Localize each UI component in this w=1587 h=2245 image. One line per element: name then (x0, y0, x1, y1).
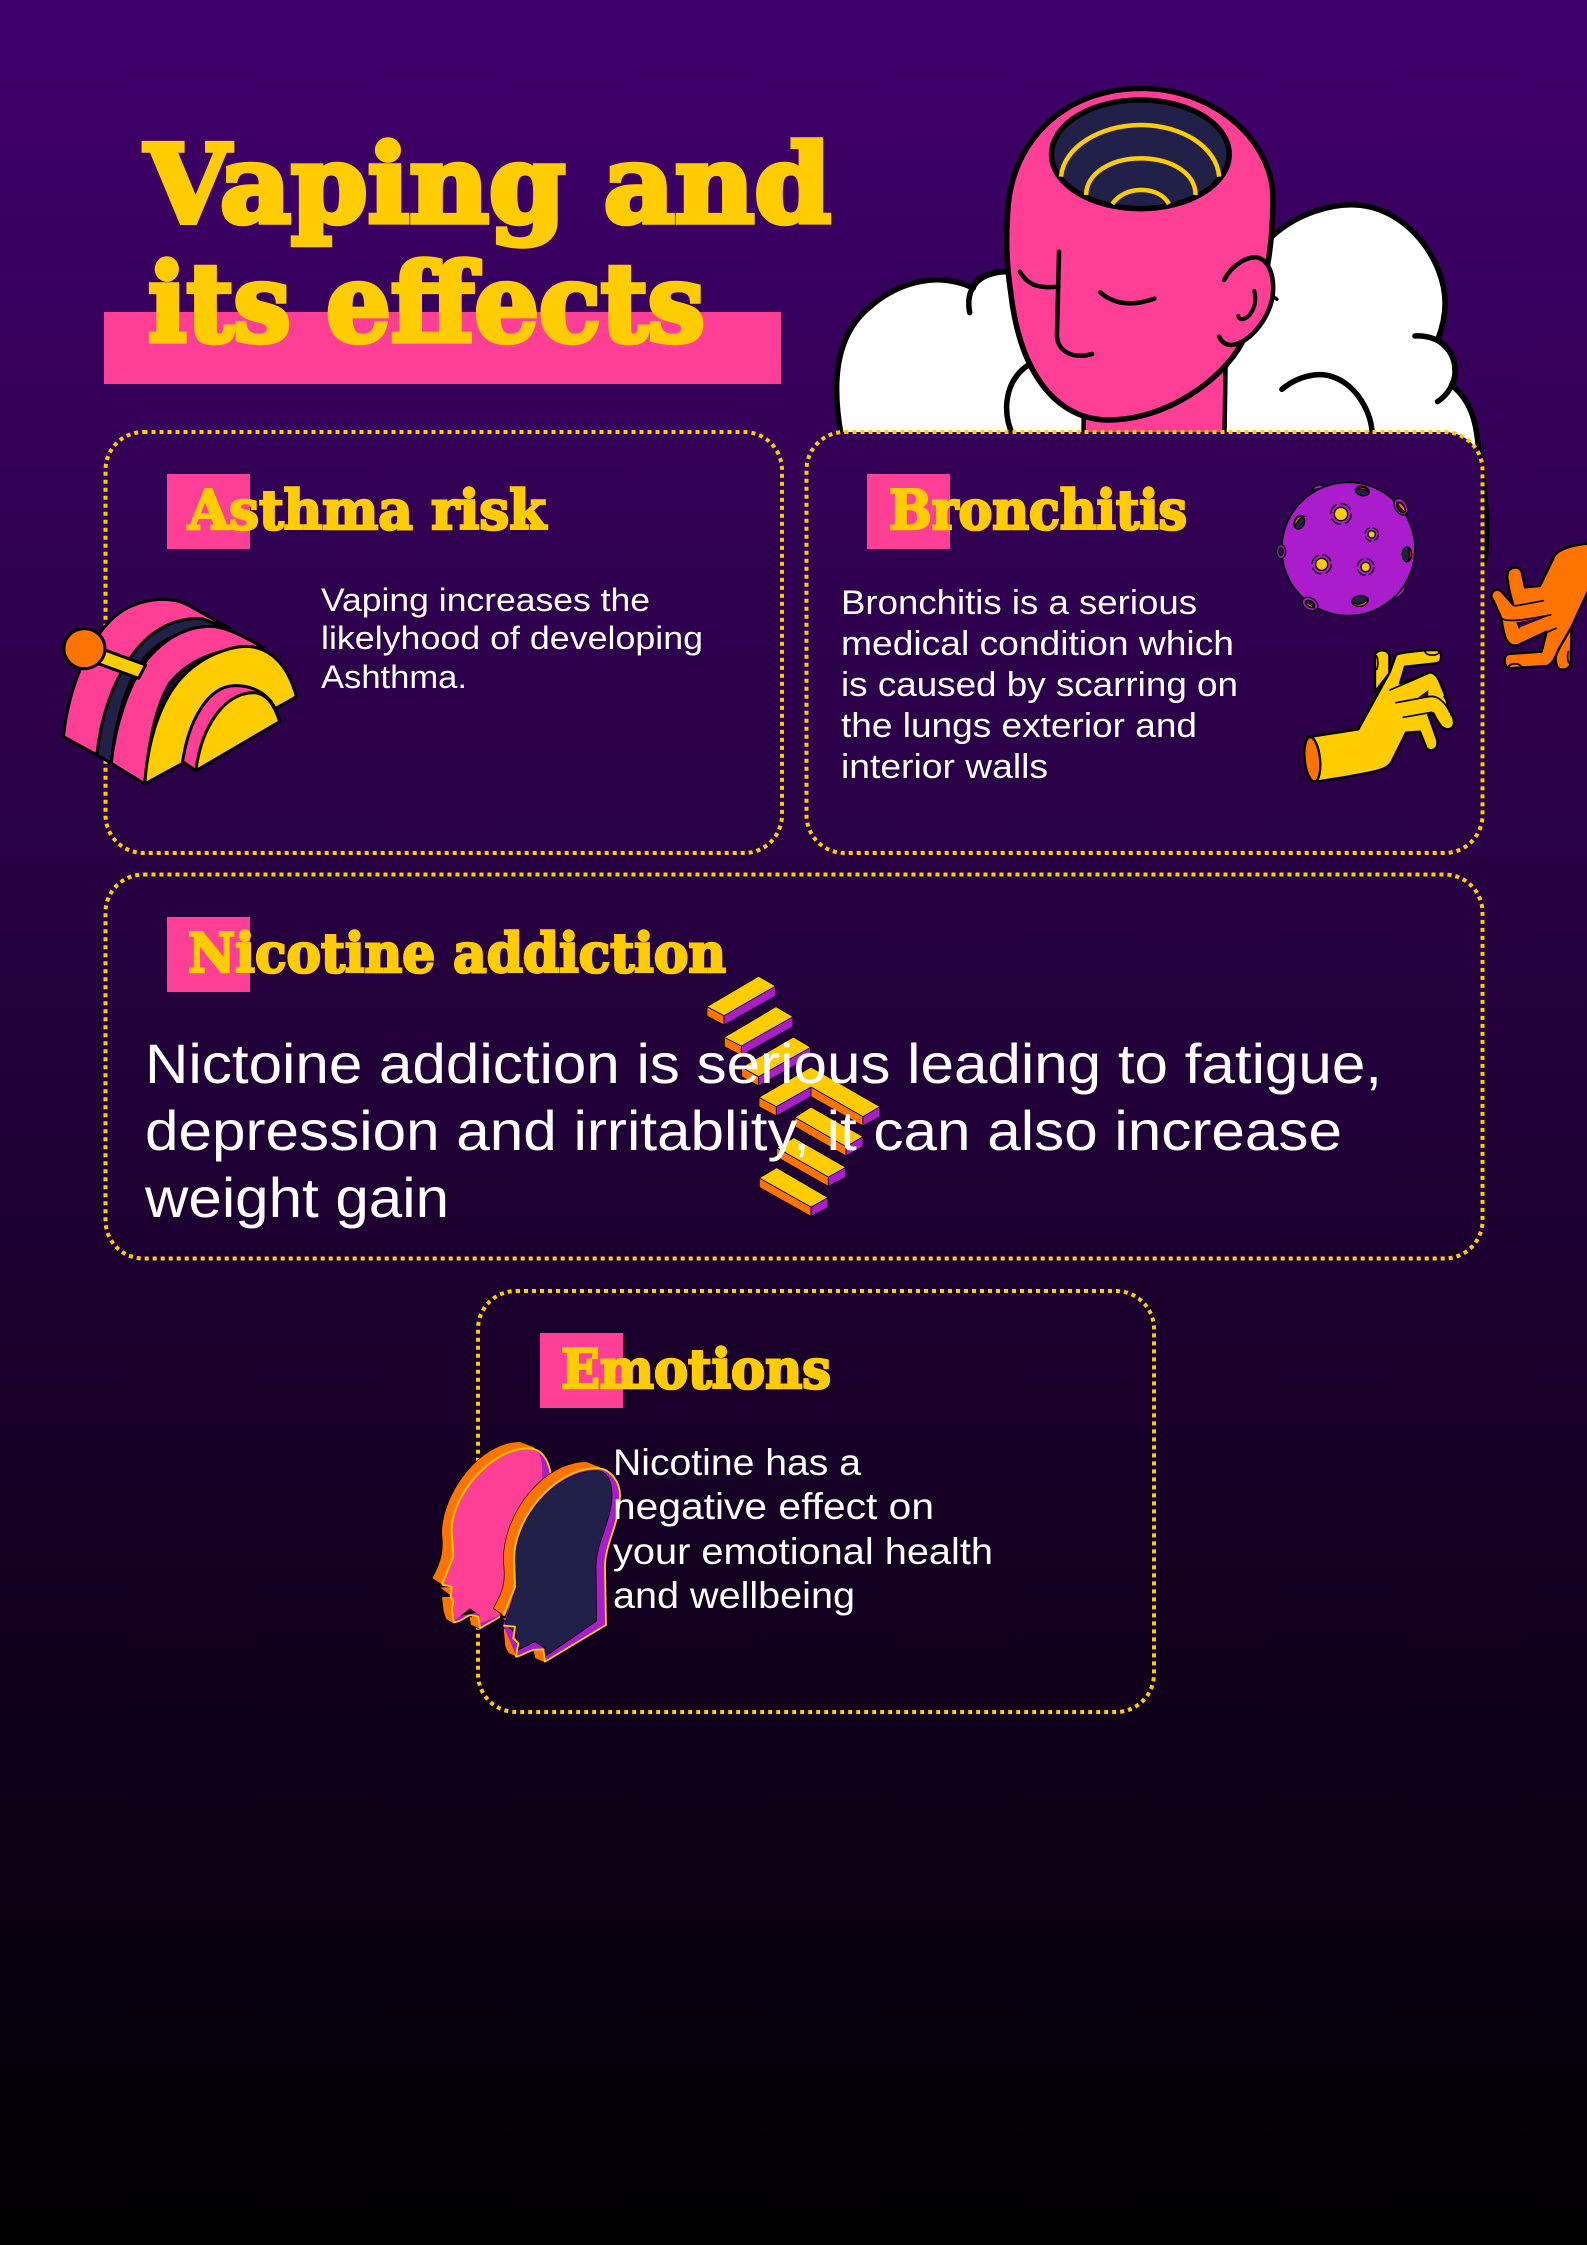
body text: is caused by scarring on (841, 666, 1238, 704)
heading marker (540, 1333, 623, 1408)
body text: nicotine addiction (144, 1032, 1382, 1229)
panel: nicotine addiction (106, 874, 1482, 1258)
body text: emotions: your emotional health (613, 1531, 993, 1572)
body text: interior walls (841, 748, 1048, 786)
icon: isometric zigzag stair (707, 976, 880, 1216)
front navy head (493, 1462, 620, 1663)
title: its effects (148, 241, 705, 367)
head outline (1007, 88, 1273, 420)
heading: nicotine addiction: Nicotine addiction (188, 921, 726, 985)
heading: bronchitis: Bronchitis (889, 478, 1187, 542)
body text: nicotine addiction: Nictoine addiction is serious leading to fatigue, (145, 1032, 1382, 1095)
body text: Ashthma. (321, 659, 467, 695)
icon: two isometric head silhouettes (432, 1442, 620, 1663)
body text: likelyhood of developing (321, 620, 703, 656)
ear (1219, 257, 1273, 345)
open skull hole with spirals (1052, 100, 1229, 209)
body text (841, 584, 1238, 786)
body text: emotions: negative effect on (613, 1486, 934, 1527)
icon: yellow pinching hand (1302, 650, 1454, 782)
panel: bronchitis (806, 432, 1482, 853)
body text: emotions: and wellbeing (613, 1575, 855, 1616)
body text: emotions: Nicotine has a (613, 1442, 861, 1483)
back pink head (432, 1442, 551, 1629)
panel: emotions (478, 1291, 1154, 1712)
panel: asthma risk (106, 432, 782, 853)
illustration: head in a cloud of vapour (837, 88, 1480, 493)
title highlight bar (104, 312, 781, 384)
heading marker (167, 474, 250, 549)
body text: Bronchitis is a serious (841, 584, 1197, 622)
icon: orange reaching hand (1491, 543, 1587, 670)
heading marker (867, 474, 950, 549)
body text: nicotine addiction: weight gain (144, 1166, 449, 1229)
heading: emotions: Emotions (561, 1337, 831, 1401)
body text: the lungs exterior and (841, 707, 1197, 745)
icon: asthma arched lung block (63, 599, 296, 784)
neck (1084, 360, 1226, 453)
cloud tail behind panel (1480, 455, 1487, 565)
body text: emotions (613, 1442, 993, 1616)
heading marker (167, 917, 250, 992)
body text (321, 582, 703, 695)
body text: Vaping increases the (321, 582, 650, 618)
icon: virus particle (1276, 482, 1415, 616)
title: Vaping and (144, 122, 831, 248)
title (144, 122, 831, 367)
body text: medical condition which (841, 625, 1234, 663)
face features (1020, 252, 1154, 356)
cloud (837, 205, 1480, 493)
heading: asthma risk: Asthma risk (187, 478, 548, 542)
body text: nicotine addiction: depression and irritablity, it can also increase (145, 1099, 1342, 1162)
